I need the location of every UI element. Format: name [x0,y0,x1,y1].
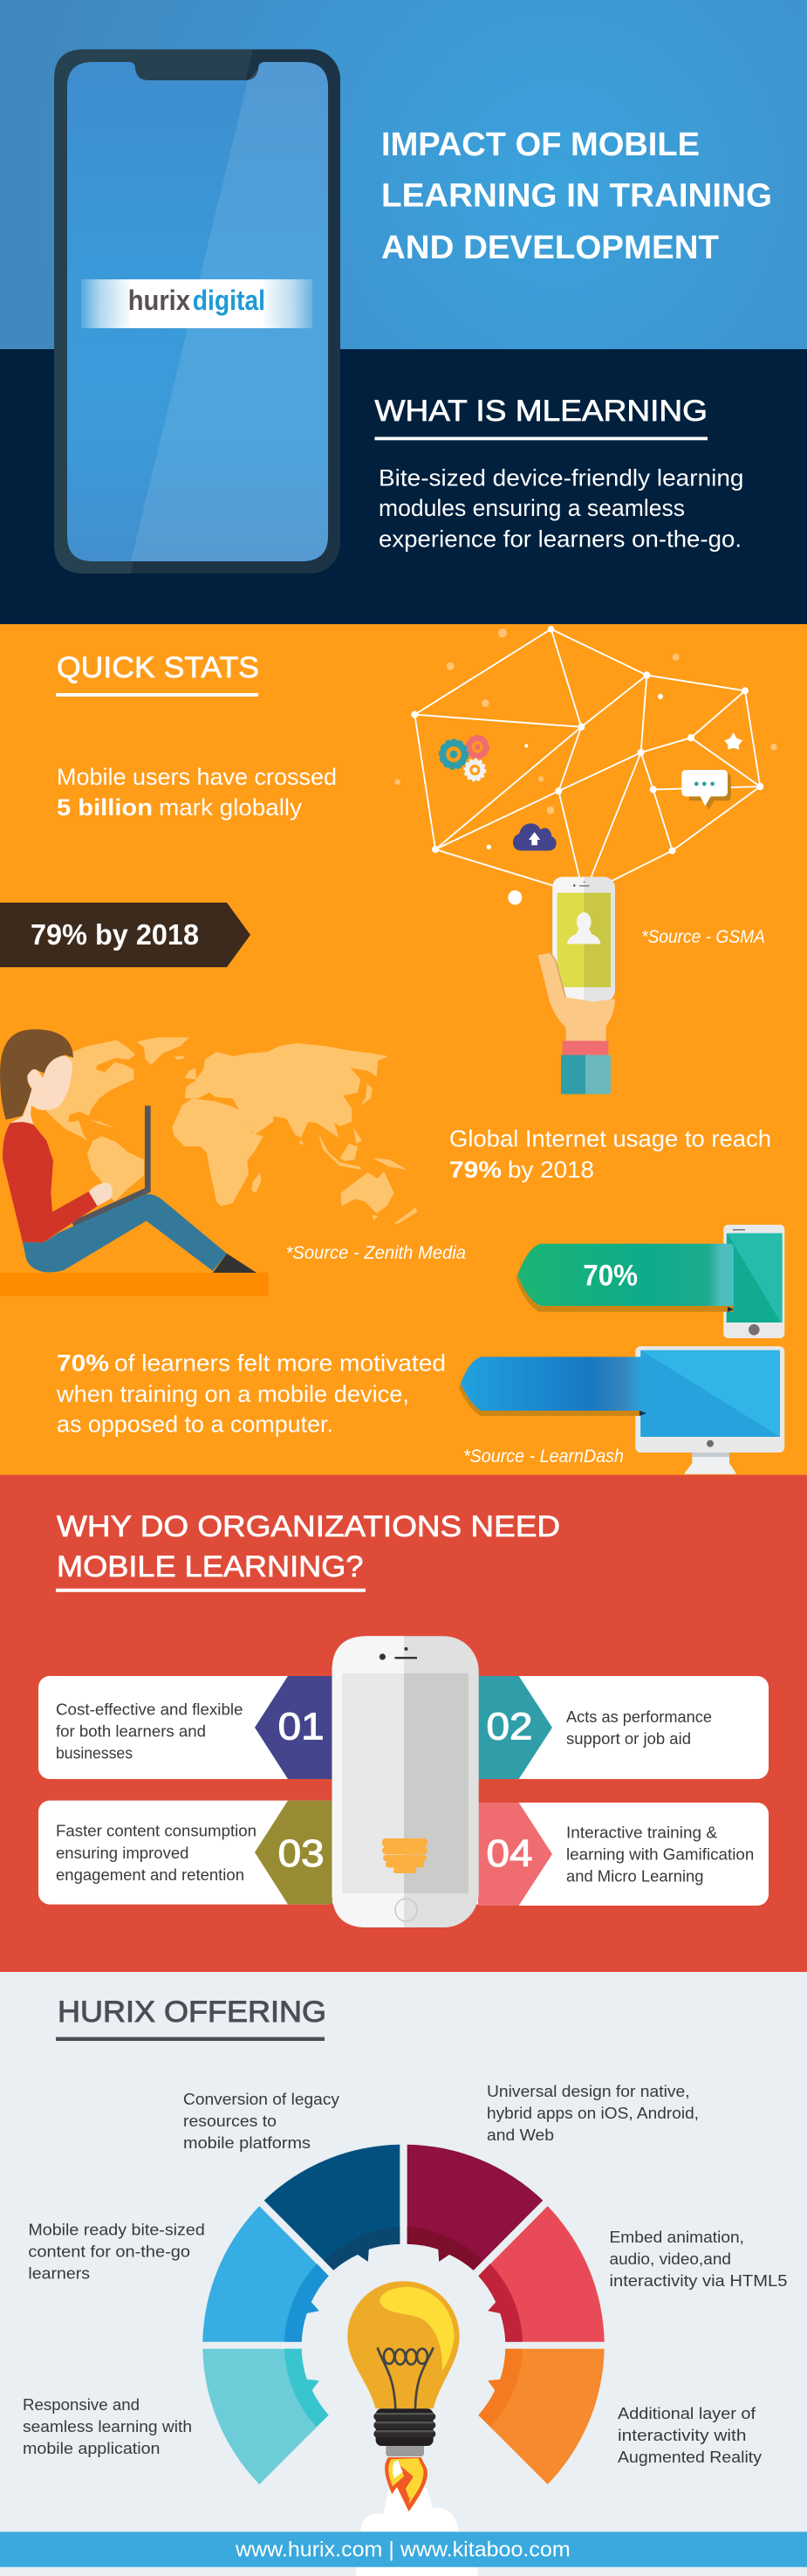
icon: speech bubble [681,770,731,810]
text: definition of mlearning [379,464,743,553]
card 04: and Micro Learning [566,1867,703,1886]
network nodes [411,626,763,905]
hair [0,1029,73,1120]
card 02: Acts as performance [566,1707,712,1726]
heading: what is mlearning [375,395,708,440]
text: 70% of learners stat: of learners felt more motivated [114,1350,446,1377]
segment: light teal [202,2349,329,2484]
text: universal design [487,2082,699,2144]
heading: quick stats: QUICK STATS [57,651,259,684]
icon: cloud upload [513,823,557,850]
hand [89,1183,113,1206]
network illustration [394,626,777,1094]
card 01: businesses [56,1744,133,1762]
card 04: 04 [487,1832,532,1875]
text: responsive: mobile application [23,2439,161,2457]
text: mobile ready: learners [28,2264,90,2283]
text: mobile users stat: 5 billion [57,794,153,821]
card 03: ensuring improved [56,1844,188,1862]
title: IMPACT OF MOBILE [381,127,700,163]
text: global internet usage stat: Global Internet usage to reach [449,1126,771,1152]
text: conversion of legacy: mobile platforms [183,2133,311,2152]
card 03: Faster content consumption [56,1822,256,1840]
phone illustration [54,49,340,574]
smoke [360,2485,458,2531]
floor shelf [0,1273,269,1296]
text: 70% of learners stat: 70% [57,1350,109,1377]
text: responsive: seamless learning with [23,2417,192,2435]
logo: hurix digital: hurix [128,285,190,316]
text: embed animation: audio, video,and [609,2250,731,2268]
card 02 [471,1676,769,1779]
card 04: Interactive training & [566,1823,718,1842]
world map [46,1037,417,1224]
bulb glass [347,2281,460,2408]
heading: hurix offering: HURIX OFFERING [58,1996,326,2029]
text: global internet usage stat: 79% [449,1157,502,1183]
icon: star [724,732,742,750]
title: LEARNING IN TRAINING [381,178,772,215]
title [381,127,772,266]
central phone [332,1636,479,1927]
heading: quick stats [56,651,259,697]
text: augmented reality [618,2404,763,2466]
icon: light bulb rocket [347,2281,460,2531]
footer bar [0,2531,807,2576]
text: responsive: Responsive and [23,2395,140,2414]
card 01: 01 [278,1706,325,1748]
segment: maroon [407,2145,543,2270]
text: definition of mlearning: experience for learners on-the-go. [379,526,742,553]
monitor with ribbon [459,1346,784,1474]
card 02: support or job aid [566,1729,691,1748]
source: GSMA: *Source - GSMA [641,927,765,947]
card 01 [38,1676,339,1779]
card 01: for both learners and [56,1721,206,1741]
card 01: Cost-effective and flexible [56,1700,243,1718]
text: mobile ready: Mobile ready bite-sized [28,2221,205,2239]
pale floating dots [394,629,777,814]
segment: red [478,2206,605,2342]
phone in hand [538,876,615,1094]
filament [378,2347,434,2408]
panel: hurix offering [0,1972,807,2576]
text: global internet usage stat: by 2018 [508,1157,594,1183]
text: 70% of learners stat [56,1350,446,1438]
heading: why do organizations: MOBILE LEARNING? [57,1550,363,1583]
torso and arm [3,1122,98,1242]
heading: why do organizations [56,1510,560,1592]
text: definition of mlearning: modules ensuring a seamless [379,495,685,521]
title: AND DEVELOPMENT [381,230,719,266]
text: augmented reality: interactivity with [618,2426,747,2444]
legs [23,1194,227,1273]
small phone with 70% ribbon [516,1225,784,1338]
logo: hurix digital [81,279,312,328]
text: embed animation: Embed animation, [609,2228,744,2246]
text: embed animation [609,2228,787,2290]
banner: 79% by 2018: 79% by 2018 [31,918,199,951]
semicircle segments chart [202,2145,605,2484]
segment: orange [478,2349,605,2484]
text: responsive [23,2395,192,2457]
source: LearnDash: *Source - LearnDash [463,1446,624,1467]
heading: what is mlearning: WHAT IS MLEARNING [375,395,708,428]
text: definition of mlearning: Bite-sized device-friendly learning [379,464,743,491]
footer bar: www.hurix.com | www.kitaboo.com [235,2538,571,2562]
hand [538,953,615,1041]
heading: hurix offering [56,1996,326,2041]
text: mobile users stat: mark globally [159,794,303,821]
face and neck [10,1055,72,1124]
text: conversion of legacy: Conversion of legacy [183,2090,340,2108]
woman with laptop [0,1029,269,1296]
text: global internet usage stat [449,1126,771,1183]
small phone with 70% ribbon: 70% [583,1260,638,1293]
text: embed animation: interactivity via HTML5 [609,2271,787,2290]
card 03: engagement and retention [56,1865,244,1884]
text: 70% of learners stat: as opposed to a computer. [57,1412,333,1438]
text: mobile ready [28,2221,205,2283]
card 04: learning with Gamification [566,1845,754,1864]
card 04 [471,1803,769,1906]
icon: bulb base [382,1838,427,1873]
banner: 79% by 2018 [0,903,250,967]
text: universal design: hybrid apps on iOS, Android, [487,2104,699,2122]
heading: why do organizations: WHY DO ORGANIZATIONS NEED [57,1510,560,1543]
text: conversion of legacy: resources to [183,2112,277,2130]
shoe [213,1254,256,1273]
segment: blue [202,2206,329,2342]
text: mobile ready: content for on-the-go [28,2243,190,2261]
panel: header [0,0,807,624]
text: 70% of learners stat: when training on a mobile device, [56,1381,409,1407]
card 02: 02 [487,1706,532,1748]
card 03 [38,1801,339,1905]
text: universal design: Universal design for native, [487,2082,690,2100]
text: universal design: and Web [487,2126,554,2144]
text: conversion of legacy [183,2090,340,2152]
source: Zenith Media: *Source - Zenith Media [286,1243,466,1263]
segment: navy [264,2145,400,2270]
text: augmented reality: Additional layer of [618,2404,756,2422]
panel: why organizations need mobile learning [0,1475,807,1973]
network lines [414,629,760,886]
bulb base [386,2444,424,2456]
icon: gears [440,736,488,780]
flame [385,2457,427,2511]
logo: hurix digital: digital [193,285,265,316]
panel: quick stats [0,624,807,1475]
text: augmented reality: Augmented Reality [618,2448,763,2466]
laptop [72,1106,147,1224]
text: mobile users stat: Mobile users have crossed [57,764,337,790]
card 03: 03 [278,1832,325,1875]
text: mobile users stat [57,764,337,821]
